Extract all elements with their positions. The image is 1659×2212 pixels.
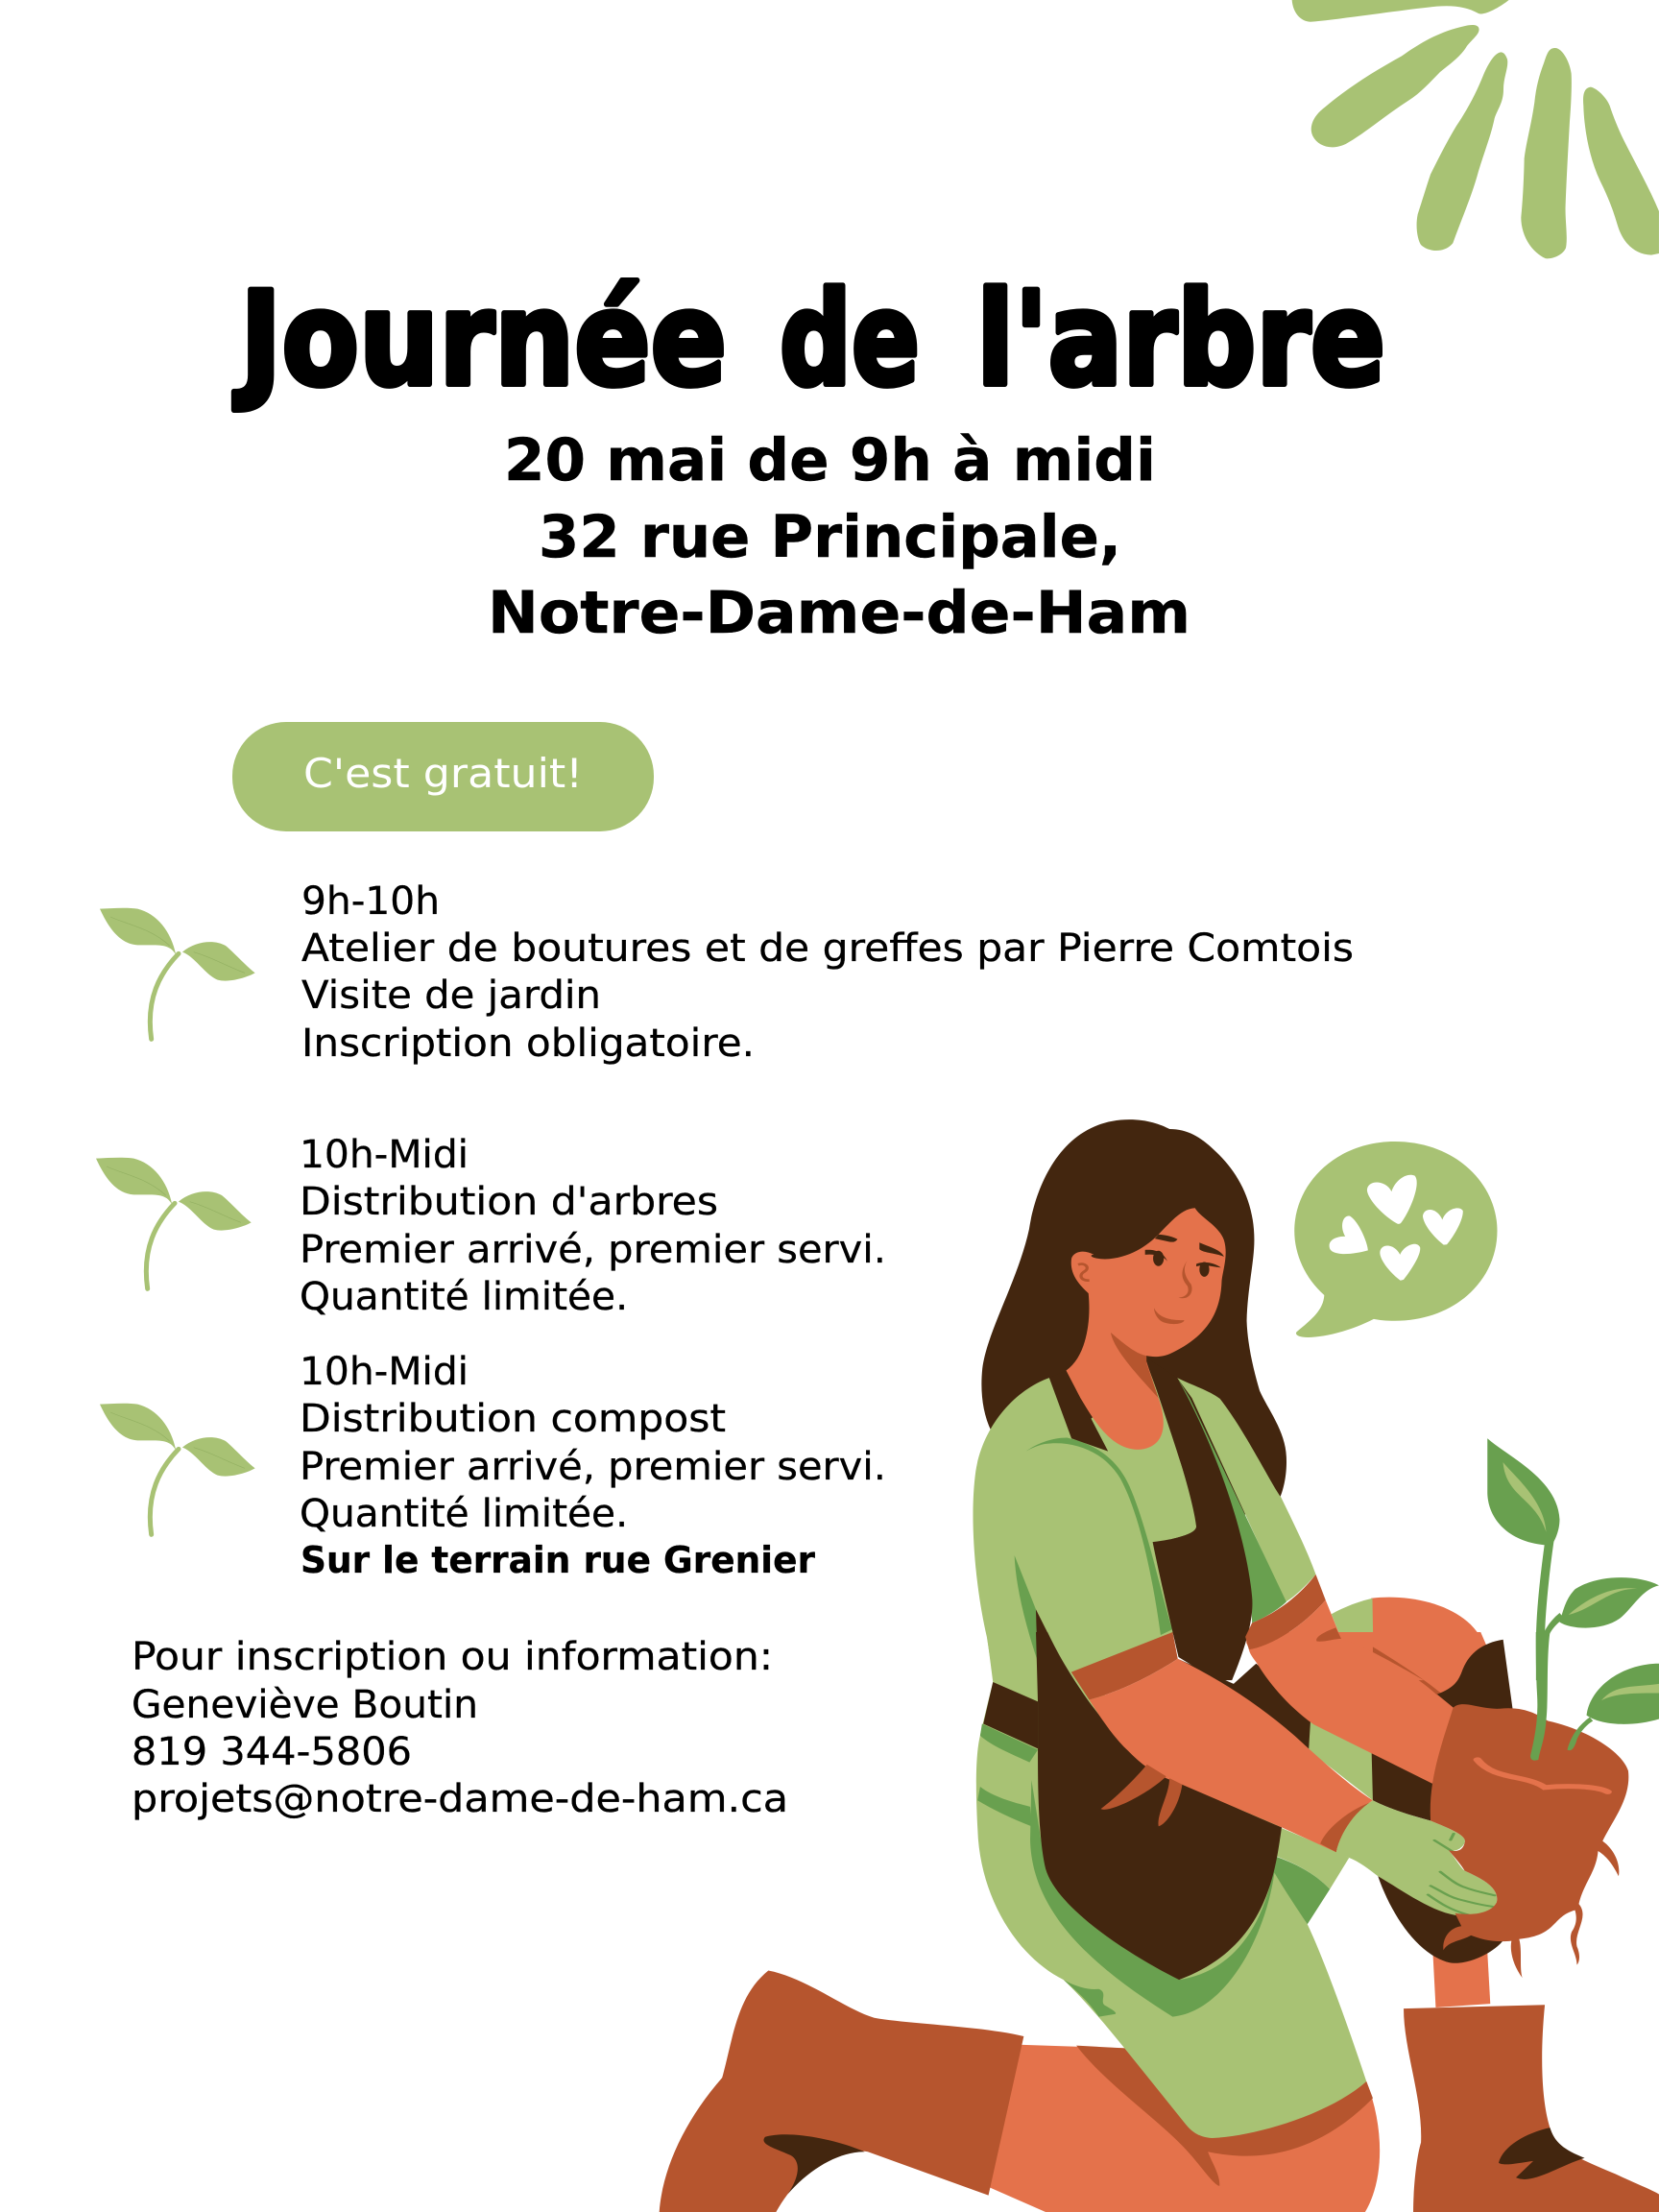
text: tree distribution: Distribution d'arbres (300, 1180, 718, 1224)
speech bubble with hearts (1294, 1142, 1497, 1337)
text: contact information: projets@notre-dame-de-ham.ca (132, 1777, 788, 1821)
text: contact information: Pour inscription ou information: (132, 1635, 773, 1679)
sun rays (1292, 0, 1659, 258)
text: compost distribution: Premier arrivé, premier servi. (300, 1445, 886, 1489)
text: contact information (132, 1635, 788, 1821)
text: compost distribution: Sur le terrain rue Grenier (301, 1539, 815, 1581)
text: contact information: 819 344-5806 (132, 1730, 412, 1774)
text: tree distribution: Quantité limitée. (300, 1275, 628, 1319)
date and address: Notre-Dame-de-Ham (488, 579, 1190, 647)
text: workshop schedule (301, 879, 1354, 1066)
icon: sprout 2 (96, 1158, 252, 1288)
title: de (780, 264, 920, 415)
icon: sprout 1 (100, 908, 255, 1039)
title (233, 264, 1385, 415)
illustration: gardener holding a seedling (660, 1119, 1659, 2212)
date and address (488, 426, 1190, 647)
neck and face (1067, 1208, 1226, 1450)
text: compost distribution: Quantité limitée. (300, 1492, 628, 1536)
text: workshop schedule: Inscription obligatoire. (301, 1022, 755, 1066)
text: tree distribution (300, 1133, 886, 1319)
date and address: 20 mai de 9h à midi (504, 426, 1156, 494)
text: compost distribution (300, 1350, 886, 1581)
text: tree distribution: Premier arrivé, premier servi. (300, 1228, 886, 1272)
title: l'arbre (976, 264, 1385, 415)
text: contact information: Geneviève Boutin (132, 1683, 478, 1727)
text: tree distribution: 10h-Midi (300, 1133, 469, 1177)
text: workshop schedule: Visite de jardin (301, 974, 601, 1018)
title: Journée (233, 264, 727, 415)
text: workshop schedule: Atelier de boutures et de greffes par Pierre Comtois (301, 926, 1354, 971)
text: compost distribution: Distribution compost (300, 1397, 726, 1441)
date and address: 32 rue Principale, (539, 503, 1121, 571)
badge: free: C'est gratuit! (303, 750, 583, 797)
text: workshop schedule: 9h-10h (301, 879, 440, 924)
text: compost distribution: 10h-Midi (300, 1350, 469, 1394)
badge: free (232, 722, 654, 831)
icon: sprout 3 (100, 1404, 255, 1534)
